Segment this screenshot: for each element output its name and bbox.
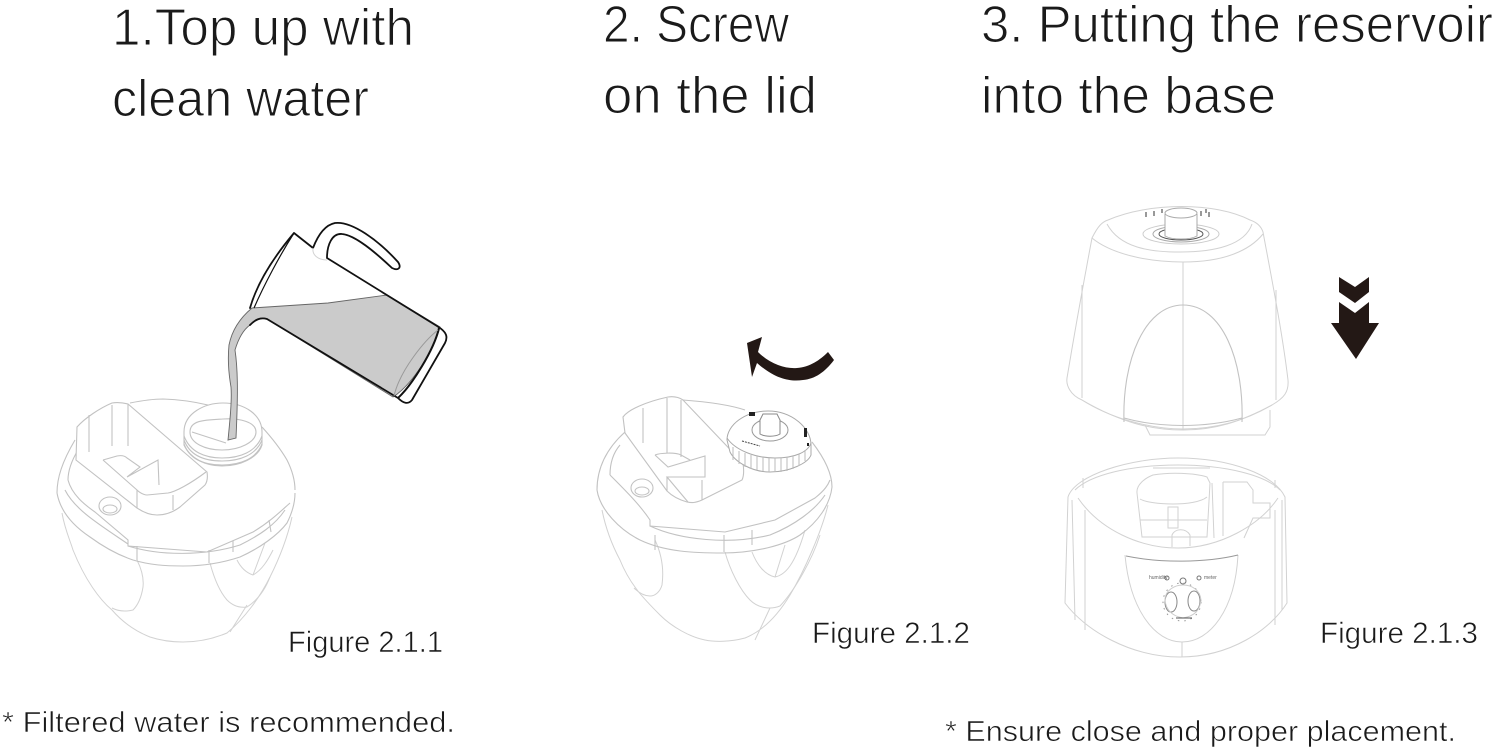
- control panel: humidity: [1149, 575, 1168, 581]
- caption: Figure 2.1.1: Figure 2.1.1: [288, 626, 443, 659]
- illustration: humidifier base: [1065, 458, 1287, 657]
- illustration: water tank being filled: [57, 223, 446, 642]
- control knob: [1143, 208, 1219, 244]
- illustration: lid screwed on tank: [597, 397, 832, 641]
- tank lid: [57, 399, 295, 566]
- tank body: [62, 513, 292, 642]
- heading: step 2: [603, 0, 817, 125]
- heading: step 1: clean water: [112, 70, 369, 128]
- control panel: meter: [1204, 575, 1217, 581]
- screw-on lid: [727, 411, 811, 472]
- illustration: reservoir top unit: [1067, 206, 1288, 435]
- tank screw neck: [184, 403, 262, 466]
- caption: Figure 2.1.2: Figure 2.1.2: [812, 617, 970, 650]
- arrow: lower reservoir: [1331, 277, 1379, 359]
- caption: Figure 2.1.3: Figure 2.1.3: [1320, 617, 1478, 650]
- heading: step 1: 1.Top up with: [112, 0, 414, 57]
- tank reservoir compartment: [76, 403, 207, 515]
- heading: step 1: [112, 0, 414, 128]
- tank body: [602, 505, 828, 641]
- jug water: [228, 295, 440, 440]
- heading: step 3: into the base: [981, 67, 1276, 125]
- tank reservoir compartment: [623, 397, 744, 503]
- jug outline: [250, 223, 446, 403]
- arrow: rotate lid: [747, 337, 834, 381]
- tank lid: [597, 400, 832, 553]
- heading: step 3: [981, 0, 1493, 125]
- heading: step 2: on the lid: [603, 67, 817, 125]
- control panel: [1125, 555, 1238, 642]
- footnote: filtered water: * Filtered water is recommended.: [2, 707, 455, 739]
- footnote: placement: * Ensure close and proper placement.: [945, 716, 1456, 748]
